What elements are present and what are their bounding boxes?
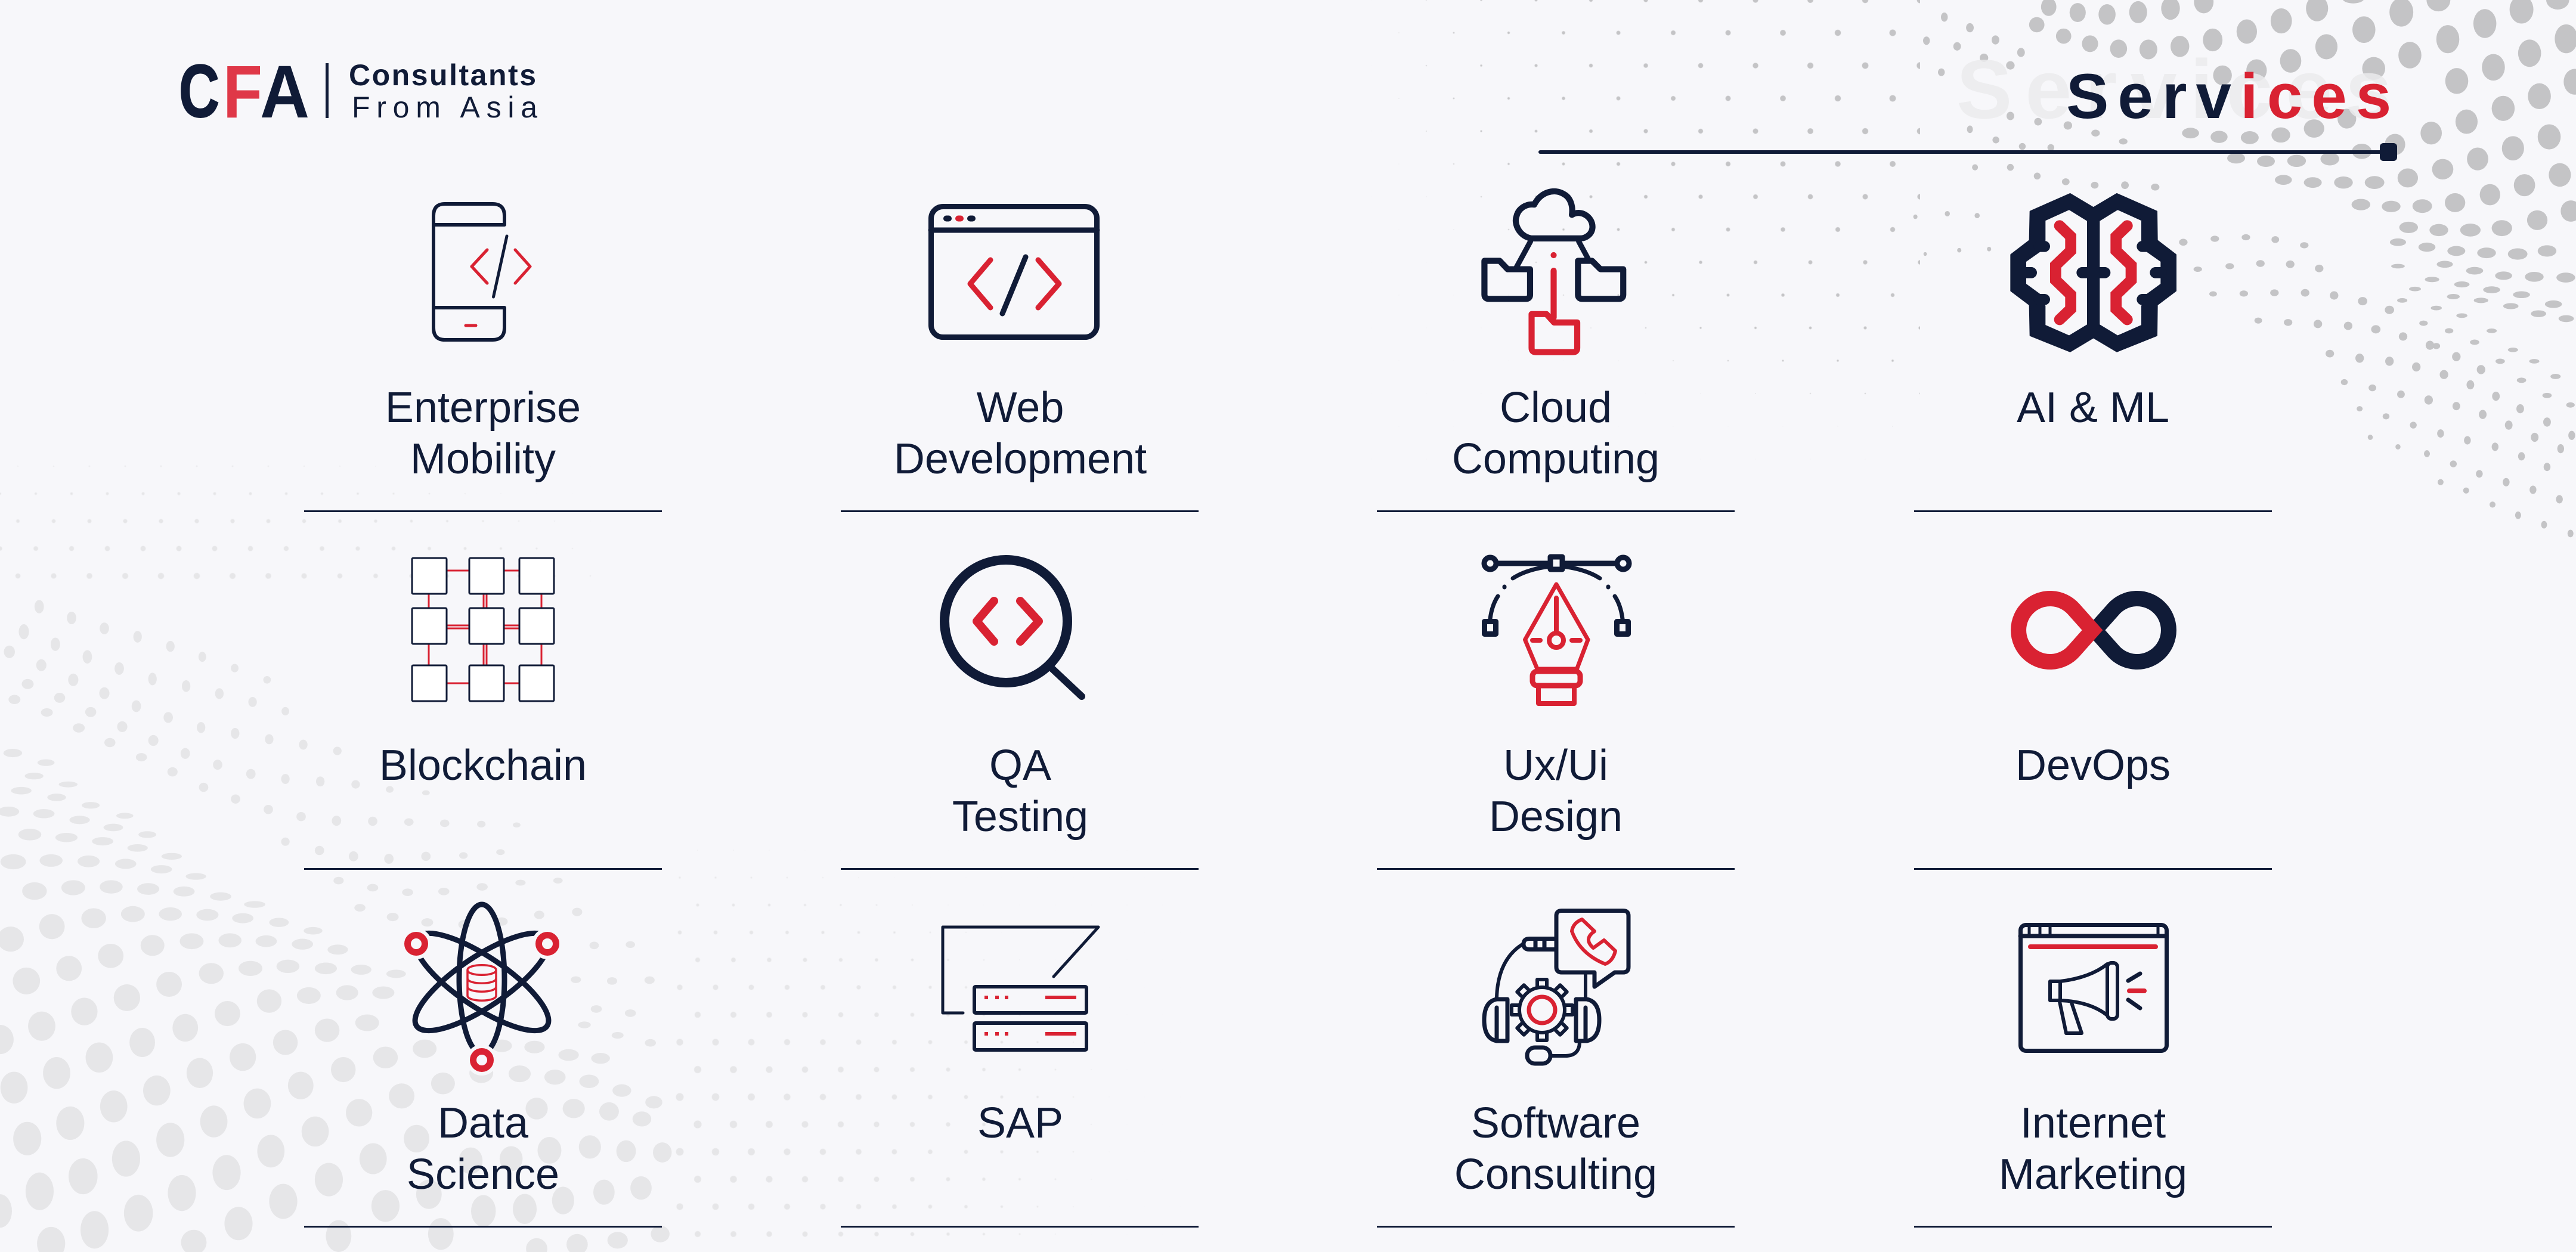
heading underline with end cap [1538, 143, 2397, 161]
panel: Data Science [401, 904, 563, 1198]
label: Science [407, 1151, 559, 1198]
panel: Internet Marketing [1999, 925, 2187, 1198]
panel: Blockchain [379, 558, 587, 789]
panel: DevOps [2015, 599, 2171, 789]
logo wordmark [349, 58, 537, 124]
panel: Enterprise Mobility [385, 204, 581, 483]
panel: SAP [943, 927, 1098, 1147]
label: Ux/Ui [1503, 742, 1608, 789]
logo wordmark: Consultants [349, 58, 536, 92]
label: Software [1471, 1099, 1640, 1147]
logo mark CFA: A [260, 51, 309, 134]
panel: AI & ML [2011, 194, 2176, 432]
label: AI & ML [2017, 384, 2169, 432]
logo mark CFA [179, 50, 309, 134]
panel: Ux/Ui Design [1484, 557, 1629, 841]
label: QA [989, 742, 1051, 789]
label: Data [438, 1099, 529, 1147]
label: DevOps [2015, 742, 2171, 789]
icon: block grid [412, 558, 554, 701]
panel: QA Testing [945, 560, 1088, 841]
label: Blockchain [379, 742, 587, 789]
heading: Services with ghost shadow: Services [2066, 60, 2400, 132]
icon: servers [943, 927, 1098, 1050]
icon: browser window with code [931, 206, 1097, 337]
logo mark CFA: C [179, 50, 219, 133]
label: Consulting [1454, 1151, 1657, 1198]
icon: mobile phone with code [434, 204, 530, 340]
panel: Software Consulting [1454, 911, 1657, 1198]
label: Mobility [410, 435, 556, 483]
icon: pen tool [1484, 557, 1629, 704]
panel: Web Development [894, 206, 1147, 483]
logo: CFA Consultants From Asia [179, 50, 537, 134]
icon: browser with megaphone [2020, 925, 2167, 1050]
label: Development [894, 435, 1147, 483]
icon: magnifier with code [945, 560, 1082, 696]
icon: infinity loop [2018, 599, 2169, 662]
panel: Cloud Computing [1452, 191, 1659, 483]
label: Testing [952, 793, 1088, 841]
label: Design [1489, 793, 1623, 841]
icon: brain circuit [2011, 194, 2176, 351]
label: Internet [2020, 1099, 2166, 1147]
logo wordmark: From Asia [352, 91, 537, 124]
logo mark CFA: F [223, 51, 262, 134]
icon: headset with gear and phone bubble [1484, 911, 1628, 1064]
icon: cloud with folders [1484, 191, 1623, 352]
label: SAP [977, 1099, 1063, 1147]
icon: atom with database [401, 904, 563, 1076]
label: Enterprise [385, 384, 581, 432]
heading: Services with ghost shadow: Services [1956, 42, 2405, 136]
label: Web [977, 384, 1064, 432]
label: Cloud [1500, 384, 1612, 432]
label: Marketing [1999, 1151, 2187, 1198]
label: Computing [1452, 435, 1659, 483]
